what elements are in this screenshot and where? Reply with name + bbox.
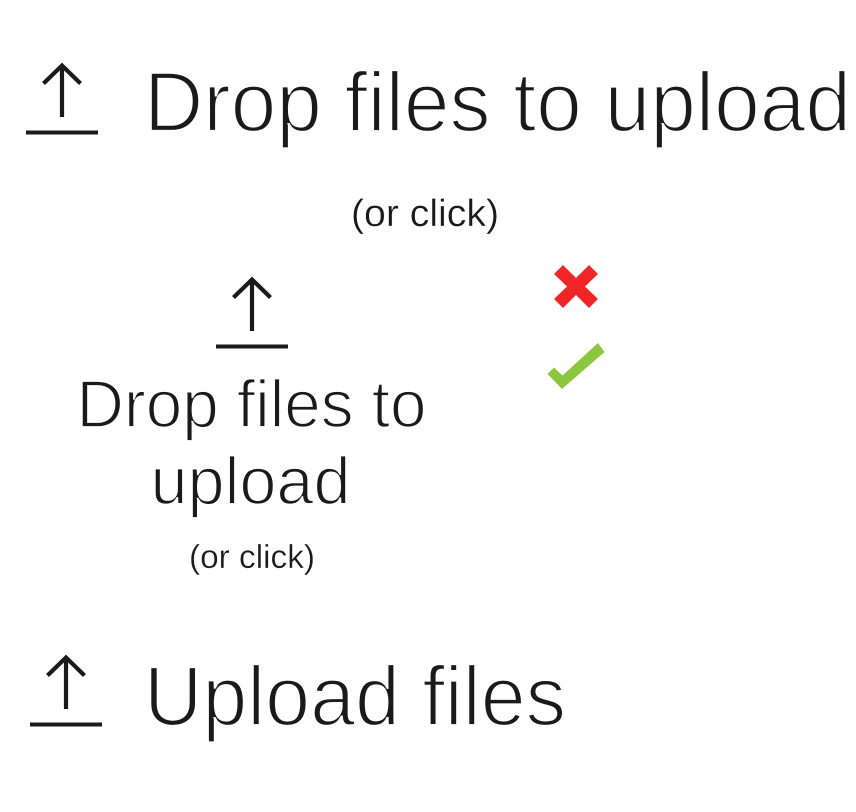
- icon: red cross: [554, 265, 598, 308]
- icon: upload arrow large: [26, 66, 98, 132]
- heading: drop files to upload, two lines: [76, 367, 426, 519]
- heading: drop files to upload, two lines: Drop files to: [76, 367, 426, 442]
- icon: upload arrow compact: [216, 280, 288, 346]
- compact upload panel: [76, 280, 426, 575]
- heading: drop files to upload: Drop files to upload: [144, 55, 851, 149]
- icon: green check: [548, 343, 604, 389]
- icon: upload arrow button: [30, 658, 102, 724]
- heading: upload files: Upload files: [144, 649, 566, 743]
- text: or click: (or click): [351, 193, 499, 235]
- upload files button: [30, 649, 566, 743]
- heading: drop files to upload, two lines: upload: [150, 444, 350, 519]
- large upload panel: [26, 55, 851, 235]
- text: or click small: (or click): [189, 538, 315, 575]
